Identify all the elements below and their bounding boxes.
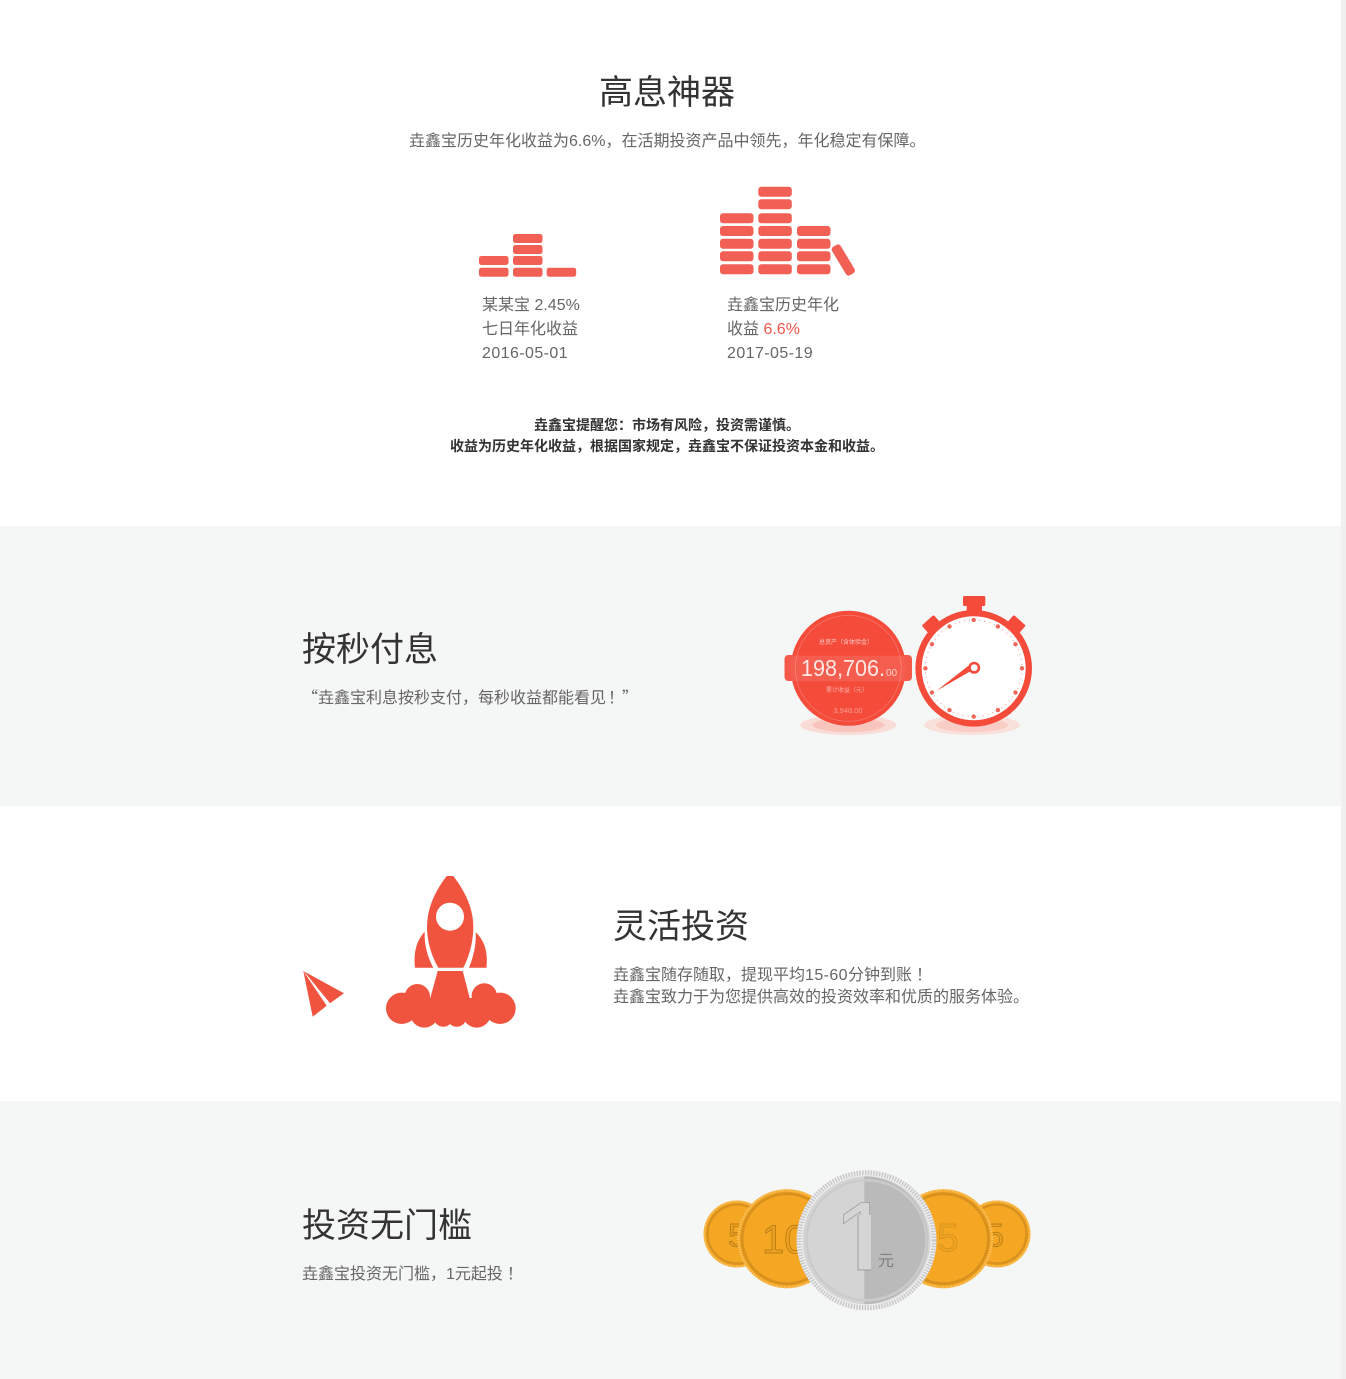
caption: product yield: 垚鑫宝历史年化 <box>727 297 839 314</box>
text: flexible investment: 垚鑫宝致力于为您提供高效的投资效率和优质的服务体验。 <box>613 989 1029 1006</box>
coin: 5 <box>894 1189 993 1288</box>
caption: product yield: 收益 6.6% <box>727 321 800 338</box>
icon: balance watch: 累计收益（元） <box>826 686 868 694</box>
risk notice <box>450 417 884 454</box>
coin: silver 1 yuan: 1 <box>833 1179 893 1300</box>
risk notice: 收益为历史年化收益，根据国家规定，垚鑫宝不保证投资本金和收益。 <box>450 438 884 454</box>
scrollbar track <box>1341 0 1346 1379</box>
risk notice: 垚鑫宝提醒您：市场有风险，投资需谨慎。 <box>534 417 800 433</box>
chart: product stacked bars <box>720 186 855 276</box>
coin: silver 1 yuan: 元 <box>878 1253 894 1270</box>
text: flexible investment <box>613 966 1029 1006</box>
text: flexible investment: 垚鑫宝随存随取，提现平均15-60分钟到账！ <box>613 967 932 984</box>
subtitle: yield summary: 垚鑫宝历史年化收益为6.6%，在活期投资产品中领先，年化稳定有保障。 <box>409 133 925 150</box>
icon: balance watch: 198,706. <box>801 655 885 681</box>
icon: paper plane <box>303 971 344 1017</box>
coin: silver 1 yuan <box>796 1170 936 1310</box>
band: low threshold background <box>0 1101 1341 1379</box>
caption: competitor yield: 2016-05-01 <box>482 345 568 362</box>
coin: far right 5 <box>964 1200 1030 1268</box>
caption: product yield <box>727 296 839 362</box>
coin: far right 5: 5 <box>986 1218 1004 1254</box>
icon: coins <box>704 1170 1030 1310</box>
caption: competitor yield: 某某宝 2.45% <box>482 297 580 314</box>
icon: balance watch: 00 <box>886 668 898 679</box>
icon: rocket <box>386 876 516 1028</box>
text: no threshold: 垚鑫宝投资无门槛，1元起投！ <box>302 1266 523 1283</box>
icon: balance watch: 总资产（含体验金） <box>819 638 873 646</box>
coin: 5: 5 <box>937 1217 959 1260</box>
coin: 10: 10 <box>762 1218 806 1262</box>
caption: competitor yield: 七日年化收益 <box>482 321 578 338</box>
heading: interest per second: 按秒付息 <box>302 631 438 669</box>
text: interest per second: “垚鑫宝利息按秒支付，每秒收益都能看见！” <box>302 684 638 708</box>
coin: far left 5 <box>704 1200 770 1268</box>
icon: balance watch: 3,948.00 <box>833 706 863 715</box>
icon: stopwatch <box>915 596 1032 735</box>
heading: flexible investment: 灵活投资 <box>613 908 749 946</box>
coin: 10 <box>738 1189 836 1288</box>
coin: far left 5: 5 <box>728 1218 746 1254</box>
title: high yield: 高息神器 <box>599 74 735 112</box>
chart: competitor stacked bars <box>479 234 576 277</box>
caption: product yield: 2017-05-19 <box>727 345 813 362</box>
icon: balance watch <box>784 610 912 735</box>
heading: no threshold: 投资无门槛 <box>302 1207 472 1245</box>
caption: competitor yield <box>482 296 580 362</box>
band: instant interest background <box>0 526 1341 806</box>
